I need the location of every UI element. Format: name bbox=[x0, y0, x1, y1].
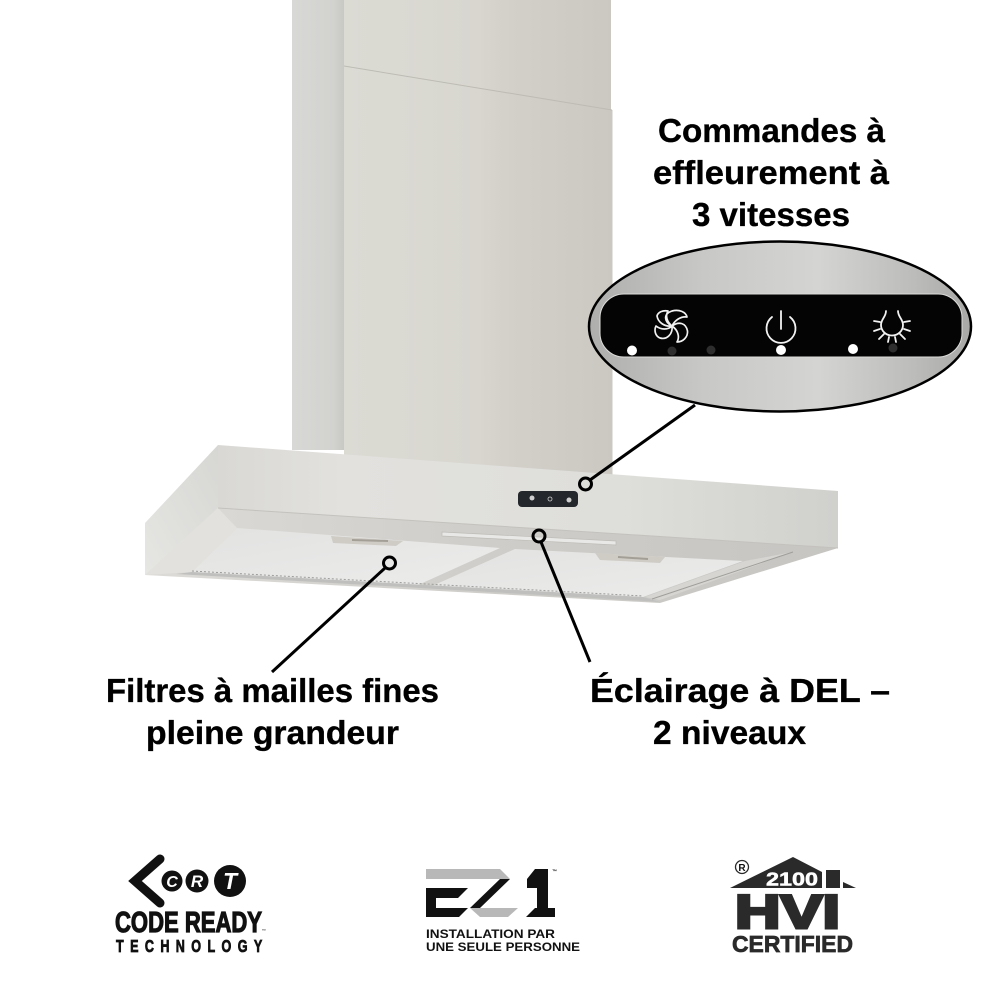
label: filters: Filtres à mailles fines bbox=[106, 672, 439, 709]
logo: code ready technology: CODE READY bbox=[115, 907, 262, 939]
logo: code ready technology: T bbox=[223, 868, 239, 894]
label: filters bbox=[106, 672, 439, 751]
logo: HVI certified: 2100 bbox=[766, 870, 818, 890]
hood control panel bbox=[518, 491, 578, 507]
label: LED lighting bbox=[590, 672, 890, 751]
icon: power bbox=[767, 311, 796, 343]
label: LED lighting: 2 niveaux bbox=[653, 714, 807, 751]
callout heading: touch controls: Commandes à bbox=[658, 112, 886, 149]
logo: HVI certified bbox=[730, 857, 856, 957]
chimney duct bbox=[292, 0, 612, 475]
callout leader: controls bbox=[580, 405, 695, 490]
logo: EZ1: ™ bbox=[552, 869, 557, 875]
callout heading: touch controls: 3 vitesses bbox=[692, 196, 850, 233]
logo: EZ1: UNE SEULE PERSONNE bbox=[426, 940, 580, 954]
logo: code ready technology: R bbox=[191, 872, 204, 891]
logo: EZ1: INSTALLATION PAR bbox=[426, 927, 555, 941]
callout leader: LED lighting bbox=[533, 530, 590, 662]
logo: code ready technology: ™ bbox=[262, 928, 266, 933]
label: LED lighting: Éclairage à DEL – bbox=[590, 672, 890, 709]
magnified control panel callout bbox=[589, 242, 971, 412]
icon: light bbox=[874, 311, 910, 342]
callout leader: filters bbox=[272, 557, 396, 672]
icon: fan bbox=[655, 310, 688, 342]
indicator dots bbox=[627, 344, 898, 356]
logo: EZ1 bbox=[426, 869, 580, 954]
callout heading: touch controls bbox=[653, 112, 890, 233]
callout heading: touch controls: effleurement à bbox=[653, 154, 890, 191]
logo: code ready technology: TECHNOLOGY bbox=[116, 937, 263, 957]
logo: HVI certified: HVI bbox=[735, 885, 840, 938]
logo: code ready technology: C bbox=[166, 874, 178, 891]
logo: code ready technology bbox=[115, 859, 266, 957]
range hood body bbox=[145, 445, 838, 603]
logo: HVI certified: CERTIFIED bbox=[732, 931, 853, 957]
logo: HVI certified: R bbox=[738, 863, 746, 874]
label: filters: pleine grandeur bbox=[146, 714, 399, 751]
